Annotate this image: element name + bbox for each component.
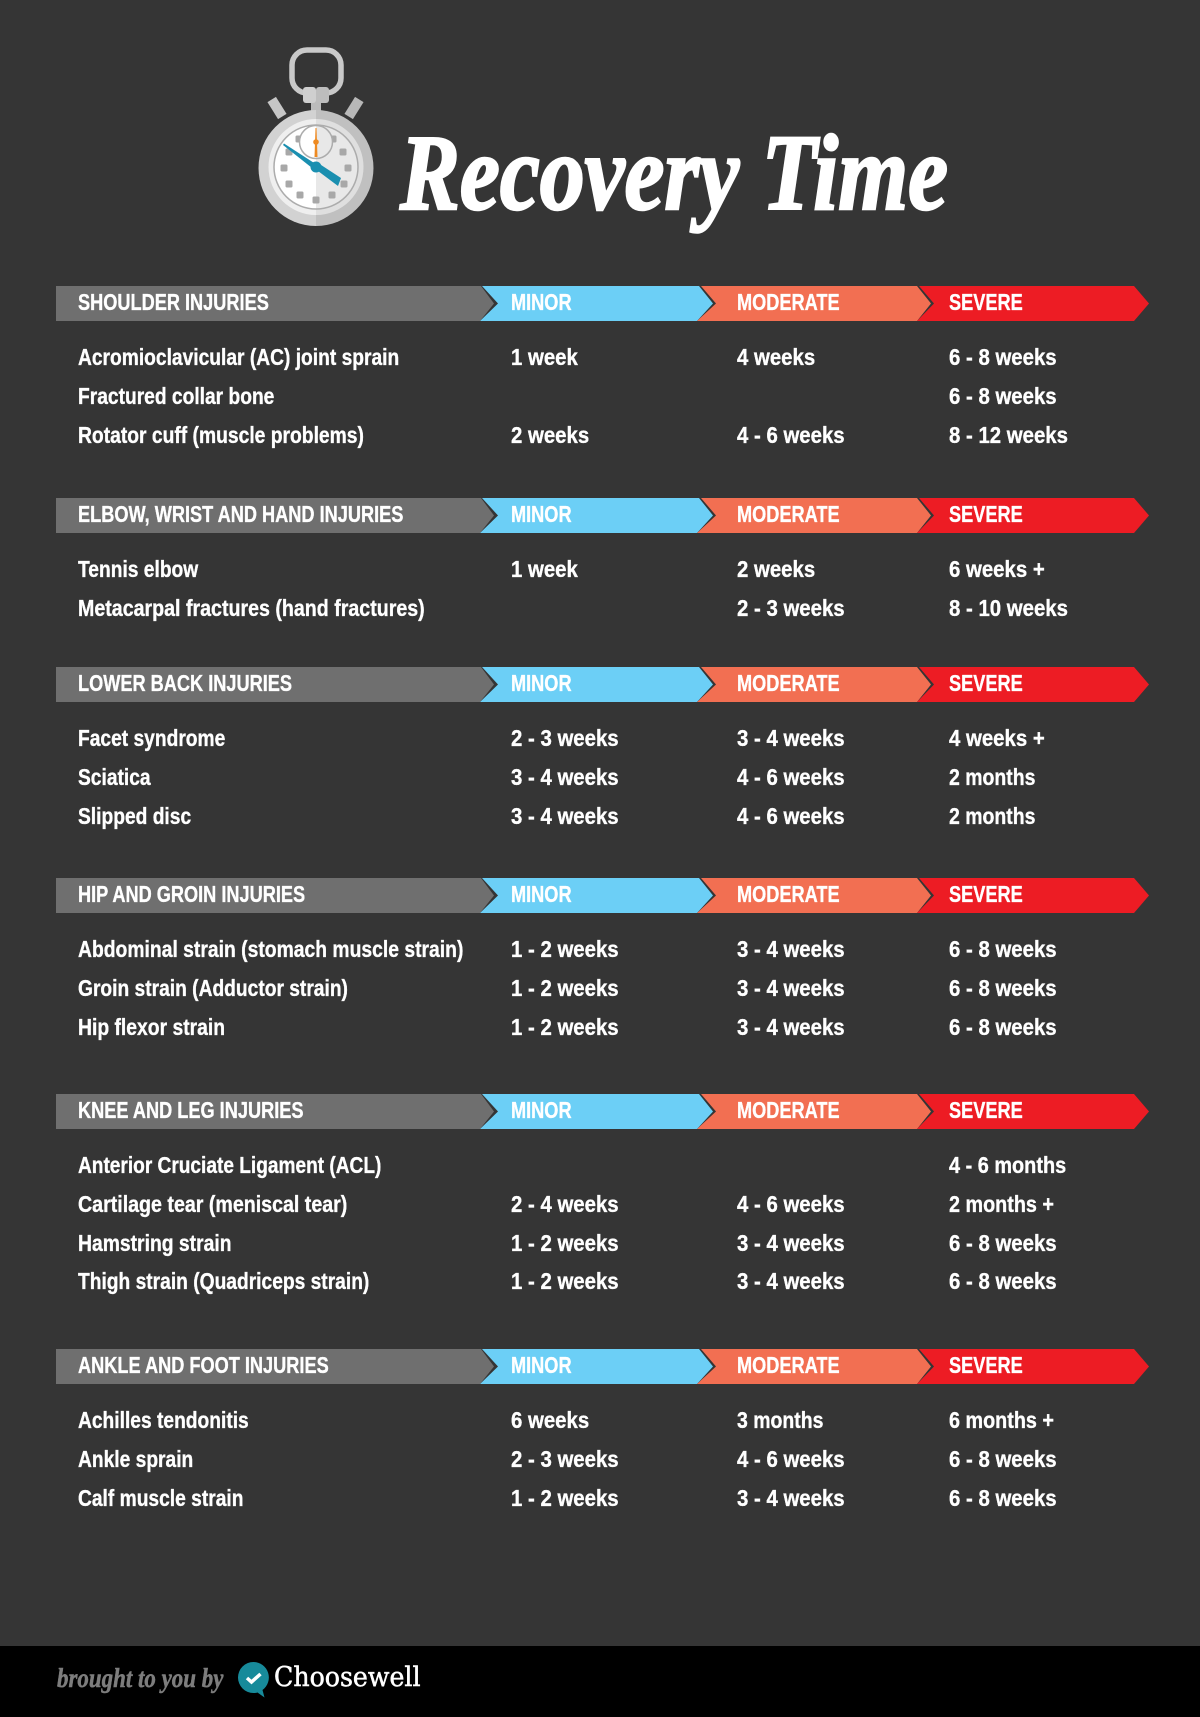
header bar: shoulder injuries: MODERATE — [737, 289, 840, 315]
row: tennis elbow: 1 week — [511, 556, 578, 582]
row: ankle sprain — [78, 1446, 1057, 1472]
header bar: knee and leg injuries: MINOR — [511, 1097, 572, 1123]
row: achilles tendonitis: 3 months — [737, 1407, 823, 1433]
text: brought to you by: brought to you by — [57, 1663, 223, 1693]
header bar: ankle and foot injuries: MODERATE — [737, 1352, 840, 1378]
row: abdominal strain — [78, 936, 1057, 962]
header bar: lower back injuries: MINOR — [511, 670, 572, 696]
row: calf muscle strain: 1 - 2 weeks — [511, 1485, 619, 1511]
row: hamstring strain: 3 - 4 weeks — [737, 1230, 845, 1256]
header bar: ankle and foot injuries — [56, 1349, 1149, 1384]
row: abdominal strain: 1 - 2 weeks — [511, 936, 619, 962]
row: AC joint sprain: 1 week — [511, 344, 578, 370]
header bar: ankle and foot injuries: ANKLE AND FOOT INJURIES — [78, 1352, 329, 1378]
row: rotator cuff: 2 weeks — [511, 422, 589, 448]
row: sciatica: 4 - 6 weeks — [737, 764, 845, 790]
panel: footer — [0, 1646, 1200, 1717]
row: rotator cuff — [78, 422, 1068, 448]
icon: stopwatch — [258, 47, 374, 226]
header bar: elbow, wrist and hand injuries — [56, 498, 1149, 533]
row: achilles tendonitis — [78, 1407, 1054, 1433]
row: facet syndrome: 2 - 3 weeks — [511, 725, 619, 751]
header bar: ankle and foot injuries: SEVERE — [949, 1352, 1023, 1378]
header bar: hip and groin injuries: MINOR — [511, 881, 572, 907]
row: AC joint sprain: Acromioclavicular (AC) joint sprain — [78, 344, 399, 370]
row: metacarpal fractures — [78, 595, 1068, 622]
row: AC joint sprain: 4 weeks — [737, 344, 815, 370]
panel: knee and leg injuries — [56, 1094, 1149, 1294]
icon: choosewell logo — [238, 1662, 269, 1698]
header bar: elbow, wrist and hand injuries: ELBOW, WRIST AND HAND INJURIES — [78, 501, 403, 527]
row: hip flexor strain: 6 - 8 weeks — [949, 1014, 1057, 1040]
row: achilles tendonitis: Achilles tendonitis — [78, 1407, 249, 1433]
row: tennis elbow: 6 weeks + — [949, 556, 1045, 582]
row: facet syndrome: 4 weeks + — [949, 725, 1045, 751]
row: calf muscle strain — [78, 1485, 1057, 1511]
row: metacarpal fractures: Metacarpal fractures (hand fractures) — [78, 595, 425, 621]
panel: shoulder injuries — [56, 286, 1149, 448]
header bar: lower back injuries — [56, 667, 1149, 702]
row: cartilage tear: 2 months + — [949, 1191, 1054, 1217]
row: tennis elbow: Tennis elbow — [78, 556, 198, 582]
header bar: lower back injuries: SEVERE — [949, 670, 1023, 696]
row: hamstring strain — [78, 1230, 1057, 1256]
row: thigh strain: 3 - 4 weeks — [737, 1268, 845, 1294]
row: metacarpal fractures: 8 - 10 weeks — [949, 595, 1068, 621]
row: metacarpal fractures: 2 - 3 weeks — [737, 595, 845, 621]
header bar: knee and leg injuries: KNEE AND LEG INJURIES — [78, 1097, 303, 1123]
row: thigh strain — [78, 1268, 1057, 1294]
row: tennis elbow: 2 weeks — [737, 556, 815, 582]
row: tennis elbow — [78, 556, 1045, 582]
panel: hip and groin injuries — [56, 878, 1149, 1040]
row: rotator cuff: 4 - 6 weeks — [737, 422, 845, 448]
row: hamstring strain: 6 - 8 weeks — [949, 1230, 1057, 1256]
row: calf muscle strain: 3 - 4 weeks — [737, 1485, 845, 1511]
header bar: elbow, wrist and hand injuries: MINOR — [511, 501, 572, 527]
header bar: elbow, wrist and hand injuries: SEVERE — [949, 501, 1023, 527]
row: abdominal strain: Abdominal strain (stomach muscle strain) — [78, 936, 463, 962]
row: groin strain: 3 - 4 weeks — [737, 975, 845, 1001]
row: slipped disc: 2 months — [949, 803, 1035, 829]
header bar: lower back injuries: LOWER BACK INJURIES — [78, 670, 292, 696]
header bar: shoulder injuries: SEVERE — [949, 289, 1023, 315]
row: AC joint sprain: 6 - 8 weeks — [949, 344, 1057, 370]
row: achilles tendonitis: 6 weeks — [511, 1407, 589, 1433]
header bar: ankle and foot injuries: MINOR — [511, 1352, 572, 1378]
row: facet syndrome: Facet syndrome — [78, 725, 225, 751]
header bar: knee and leg injuries — [56, 1094, 1149, 1129]
header bar: hip and groin injuries: MODERATE — [737, 881, 840, 907]
row: calf muscle strain: Calf muscle strain — [78, 1485, 243, 1511]
header bar: knee and leg injuries: MODERATE — [737, 1097, 840, 1123]
header bar: shoulder injuries: SHOULDER INJURIES — [78, 289, 269, 315]
row: slipped disc — [78, 803, 1035, 830]
row: anterior cruciate ligament: 4 - 6 months — [949, 1152, 1066, 1178]
row: sciatica: Sciatica — [78, 764, 151, 790]
row: groin strain: 6 - 8 weeks — [949, 975, 1057, 1001]
row: rotator cuff: 8 - 12 weeks — [949, 422, 1068, 448]
header bar: knee and leg injuries: SEVERE — [949, 1097, 1023, 1123]
header bar: hip and groin injuries: HIP AND GROIN INJURIES — [78, 881, 305, 907]
row: sciatica — [78, 764, 1035, 790]
row: sciatica: 2 months — [949, 764, 1035, 790]
row: fractured collar bone — [78, 383, 1057, 409]
row: rotator cuff: Rotator cuff (muscle problems) — [78, 422, 364, 448]
row: hip flexor strain — [78, 1014, 1057, 1040]
row: slipped disc: 3 - 4 weeks — [511, 803, 619, 829]
row: thigh strain: Thigh strain (Quadriceps strain) — [78, 1268, 369, 1294]
row: abdominal strain: 3 - 4 weeks — [737, 936, 845, 962]
row: thigh strain: 6 - 8 weeks — [949, 1268, 1057, 1294]
header bar: lower back injuries: MODERATE — [737, 670, 840, 696]
row: groin strain: Groin strain (Adductor strain) — [78, 975, 348, 1001]
row: groin strain — [78, 975, 1057, 1002]
title: Recovery Time — [400, 114, 948, 233]
row: ankle sprain: 6 - 8 weeks — [949, 1446, 1057, 1472]
header bar: hip and groin injuries — [56, 878, 1149, 913]
header bar: shoulder injuries: MINOR — [511, 289, 572, 315]
row: thigh strain: 1 - 2 weeks — [511, 1268, 619, 1294]
row: hip flexor strain: 3 - 4 weeks — [737, 1014, 845, 1040]
header bar: shoulder injuries — [56, 286, 1149, 321]
row: groin strain: 1 - 2 weeks — [511, 975, 619, 1001]
row: calf muscle strain: 6 - 8 weeks — [949, 1485, 1057, 1511]
row: anterior cruciate ligament — [78, 1152, 1066, 1178]
header bar: elbow, wrist and hand injuries: MODERATE — [737, 501, 840, 527]
panel: elbow, wrist and hand injuries — [56, 498, 1149, 622]
row: fractured collar bone: Fractured collar bone — [78, 383, 274, 409]
header bar: hip and groin injuries: SEVERE — [949, 881, 1023, 907]
panel: lower back injuries — [56, 667, 1149, 830]
row: cartilage tear — [78, 1191, 1054, 1218]
row: slipped disc: Slipped disc — [78, 803, 191, 829]
row: hip flexor strain: Hip flexor strain — [78, 1014, 225, 1040]
row: hamstring strain: 1 - 2 weeks — [511, 1230, 619, 1256]
row: cartilage tear: 2 - 4 weeks — [511, 1191, 619, 1217]
row: cartilage tear: Cartilage tear (meniscal tear) — [78, 1191, 347, 1217]
row: ankle sprain: Ankle sprain — [78, 1446, 193, 1472]
row: AC joint sprain — [78, 344, 1057, 370]
row: hip flexor strain: 1 - 2 weeks — [511, 1014, 619, 1040]
row: ankle sprain: 2 - 3 weeks — [511, 1446, 619, 1472]
panel: ankle and foot injuries — [56, 1349, 1149, 1511]
row: cartilage tear: 4 - 6 weeks — [737, 1191, 845, 1217]
row: ankle sprain: 4 - 6 weeks — [737, 1446, 845, 1472]
row: fractured collar bone: 6 - 8 weeks — [949, 383, 1057, 409]
row: hamstring strain: Hamstring strain — [78, 1230, 232, 1256]
text: Choosewell: Choosewell — [274, 1662, 421, 1693]
row: anterior cruciate ligament: Anterior Cruciate Ligament (ACL) — [78, 1152, 381, 1178]
row: sciatica: 3 - 4 weeks — [511, 764, 619, 790]
row: facet syndrome: 3 - 4 weeks — [737, 725, 845, 751]
row: abdominal strain: 6 - 8 weeks — [949, 936, 1057, 962]
row: achilles tendonitis: 6 months + — [949, 1407, 1054, 1433]
row: slipped disc: 4 - 6 weeks — [737, 803, 845, 829]
row: facet syndrome — [78, 725, 1045, 752]
